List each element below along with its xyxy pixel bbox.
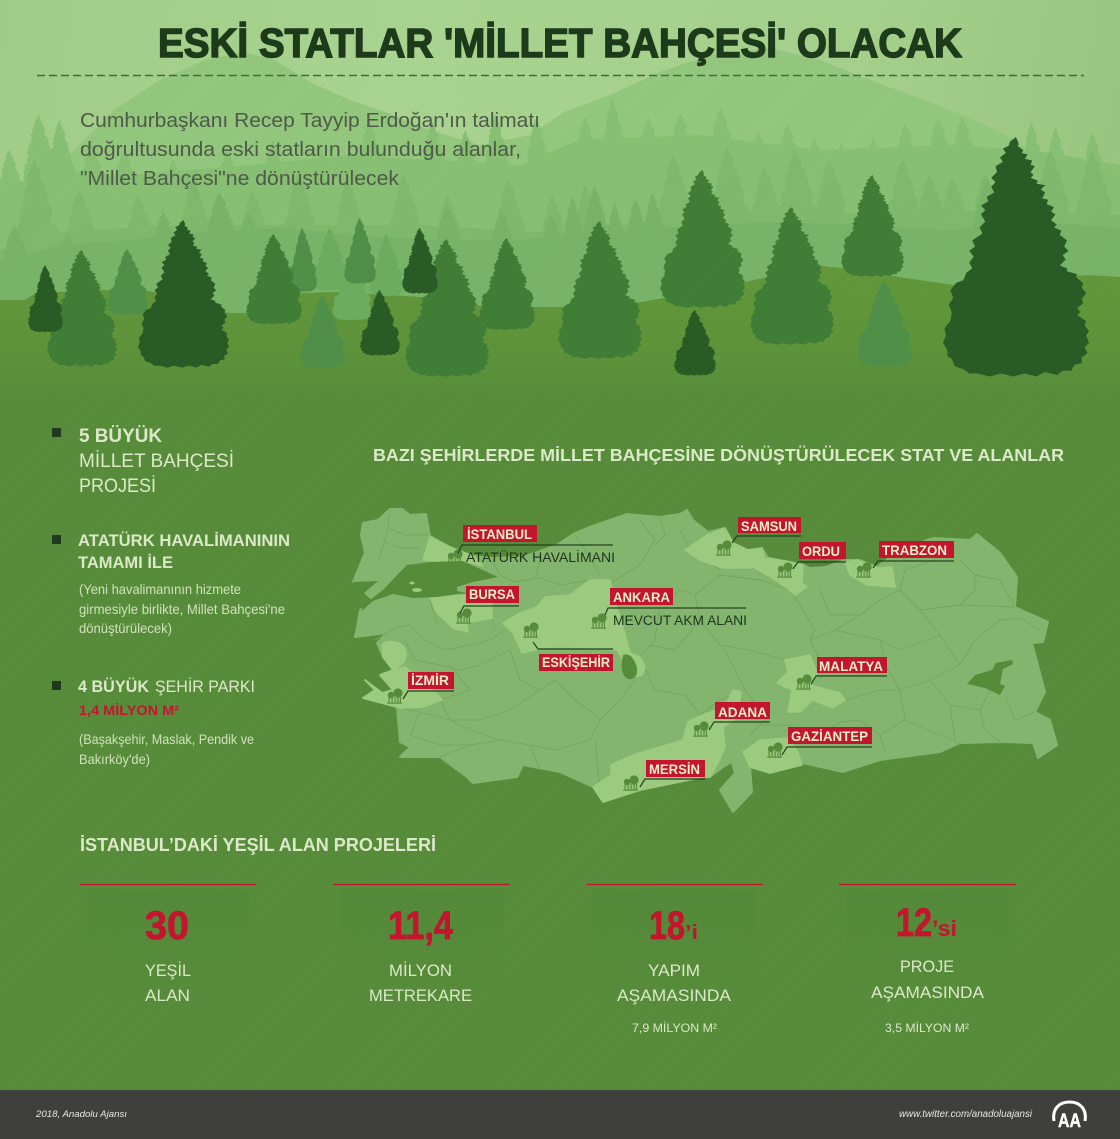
label: İstanbul: ATATÜRK HAVALİMANI — [466, 550, 615, 565]
bullet item: 4 büyük şehir parkı: ŞEHİR PARKI — [155, 677, 255, 696]
label: Ankara: ANKARA — [613, 589, 670, 605]
label: Eskişehir: ESKİŞEHİR — [542, 654, 610, 670]
seas and lakes — [340, 560, 1013, 695]
stat card: 30 yeşil alan: YEŞİL — [145, 961, 191, 980]
background: behind-ground pale trees — [312, 228, 403, 320]
label: Eskişehir — [523, 622, 613, 671]
intro text: Cumhurbaşkanı Recep Tayyip Erdoğan'ın talimatı — [80, 109, 540, 132]
background: meadow — [0, 266, 1120, 1139]
label: Gaziantep — [767, 727, 872, 758]
stat card: 11,4 milyon metrekare: 11,4 — [388, 904, 454, 948]
social link: www.twitter.com/anadoluajansi — [899, 1109, 1033, 1120]
intro text: "Millet Bahçesi"ne dönüştürülecek — [80, 167, 400, 190]
label: Trabzon: TRABZON — [882, 542, 947, 558]
stat card: 11,4 milyon metrekare: METREKARE — [369, 986, 472, 1005]
label: Malatya: MALATYA — [819, 658, 883, 674]
stat card: 12'si proje aşamasında: ’si — [932, 916, 957, 941]
label: Gaziantep: GAZİANTEP — [791, 728, 868, 744]
label: İstanbul — [447, 525, 615, 565]
title: ESKİ STATLAR 'MİLLET BAHÇESİ' OLACAK — [158, 20, 962, 66]
bullet item: 5 büyük: MİLLET BAHÇESİ — [79, 449, 234, 472]
label: Samsun: SAMSUN — [741, 518, 797, 534]
label: Samsun — [716, 517, 801, 556]
bullet item: 4 büyük şehir parkı: 4 BÜYÜK — [78, 677, 150, 696]
label: İzmir: İZMİR — [411, 672, 449, 688]
label: Ordu — [777, 542, 846, 578]
bullet item: atatürk havalimanı: dönüştürülecek) — [79, 620, 172, 636]
stat card: 18'i yapım aşamasında — [586, 884, 763, 1035]
bullet item: 5 büyük — [52, 426, 234, 497]
bullet item: 5 büyük: PROJESİ — [79, 474, 156, 497]
stat card: 12'si proje aşamasında — [839, 884, 1016, 1035]
stat card: 30 yeşil alan — [80, 884, 256, 1005]
stat card: 18'i yapım aşamasında: ’i — [685, 922, 698, 944]
bullet item: 4 büyük şehir parkı: 1,4 MİLYON M² — [79, 702, 179, 718]
label: Trabzon — [856, 541, 954, 578]
stat card: 12'si proje aşamasında: AŞAMASINDA — [871, 983, 985, 1002]
forest: mid-tone small trees — [107, 218, 912, 368]
label: Mersin — [623, 760, 705, 791]
icon: Anadolu Agency logo: AA — [1058, 1111, 1081, 1132]
label: Ankara: MEVCUT AKM ALANI — [613, 613, 747, 628]
label: Adana: ADANA — [718, 704, 767, 720]
label: Ankara — [591, 588, 747, 629]
icon: Anadolu Agency logo — [1054, 1102, 1085, 1132]
stat card: 18'i yapım aşamasında: 18 — [649, 904, 685, 948]
background: mountains — [0, 48, 1120, 330]
label: Bursa: BURSA — [469, 586, 515, 602]
stat card: 11,4 milyon metrekare — [333, 884, 510, 1005]
label: İstanbul: İSTANBUL — [467, 526, 532, 542]
stat card: 12'si proje aşamasında: PROJE — [900, 957, 954, 976]
bullet item: 4 büyük şehir parkı: (Başakşehir, Maslak, Pendik ve — [79, 731, 254, 747]
bullet item: atatürk havalimanı: girmesiyle birlikte, Millet Bahçesi'ne — [79, 601, 285, 617]
stat card: 30 yeşil alan: 30 — [145, 904, 189, 948]
title divider — [37, 74, 1084, 76]
forest: dark trees — [28, 137, 1089, 376]
land — [353, 509, 1057, 812]
bullet item: 4 büyük şehir parkı: Bakırköy'de) — [79, 751, 150, 767]
bullet item: 5 büyük: 5 BÜYÜK — [79, 426, 162, 447]
map of Turkey — [340, 509, 1057, 812]
bullet item: 4 büyük şehir parkı — [52, 677, 255, 767]
bullet item: atatürk havalimanı: TAMAMI İLE — [78, 553, 173, 572]
stat card: 18'i yapım aşamasında: 7,9 MİLYON M² — [632, 1021, 717, 1035]
stat card: 12'si proje aşamasında: 12 — [896, 901, 932, 945]
intro text — [80, 109, 540, 190]
map heading: BAZI ŞEHİRLERDE MİLLET BAHÇESİNE DÖNÜŞTÜRÜLECEK STAT VE ALANLAR — [373, 445, 1064, 465]
province borders — [375, 509, 1040, 790]
footer — [0, 1090, 1120, 1139]
stat card: 11,4 milyon metrekare: MİLYON — [389, 961, 452, 980]
label: Ordu: ORDU — [802, 543, 840, 559]
stat card: 18'i yapım aşamasında: AŞAMASINDA — [617, 986, 732, 1005]
label: Mersin: MERSİN — [649, 761, 700, 777]
highlighted provinces — [363, 528, 895, 802]
bullet item: atatürk havalimanı — [52, 531, 290, 636]
list panel: key projects — [52, 426, 290, 767]
intro text: doğrultusunda eski statların bulunduğu alanlar, — [80, 138, 521, 161]
label: İzmir — [387, 672, 454, 704]
stat card: 12'si proje aşamasında: 3,5 MİLYON M² — [885, 1021, 969, 1035]
credit: 2018, Anadolu Ajansı — [35, 1109, 127, 1120]
label: Adana — [693, 702, 770, 737]
label: Bursa — [456, 586, 519, 624]
stat card: 18'i yapım aşamasında: YAPIM — [648, 961, 700, 980]
forest: green trees — [47, 170, 904, 377]
section heading: İstanbul projects: İSTANBUL’DAKİ YEŞİL ALAN PROJELERİ — [80, 835, 436, 855]
background: distant forest — [0, 98, 1120, 330]
bullet item: atatürk havalimanı: (Yeni havalimanının hizmete — [79, 581, 241, 597]
label: Malatya — [796, 657, 887, 690]
stat card: 30 yeşil alan: ALAN — [145, 986, 190, 1005]
bullet item: atatürk havalimanı: ATATÜRK HAVALİMANININ — [78, 531, 290, 550]
